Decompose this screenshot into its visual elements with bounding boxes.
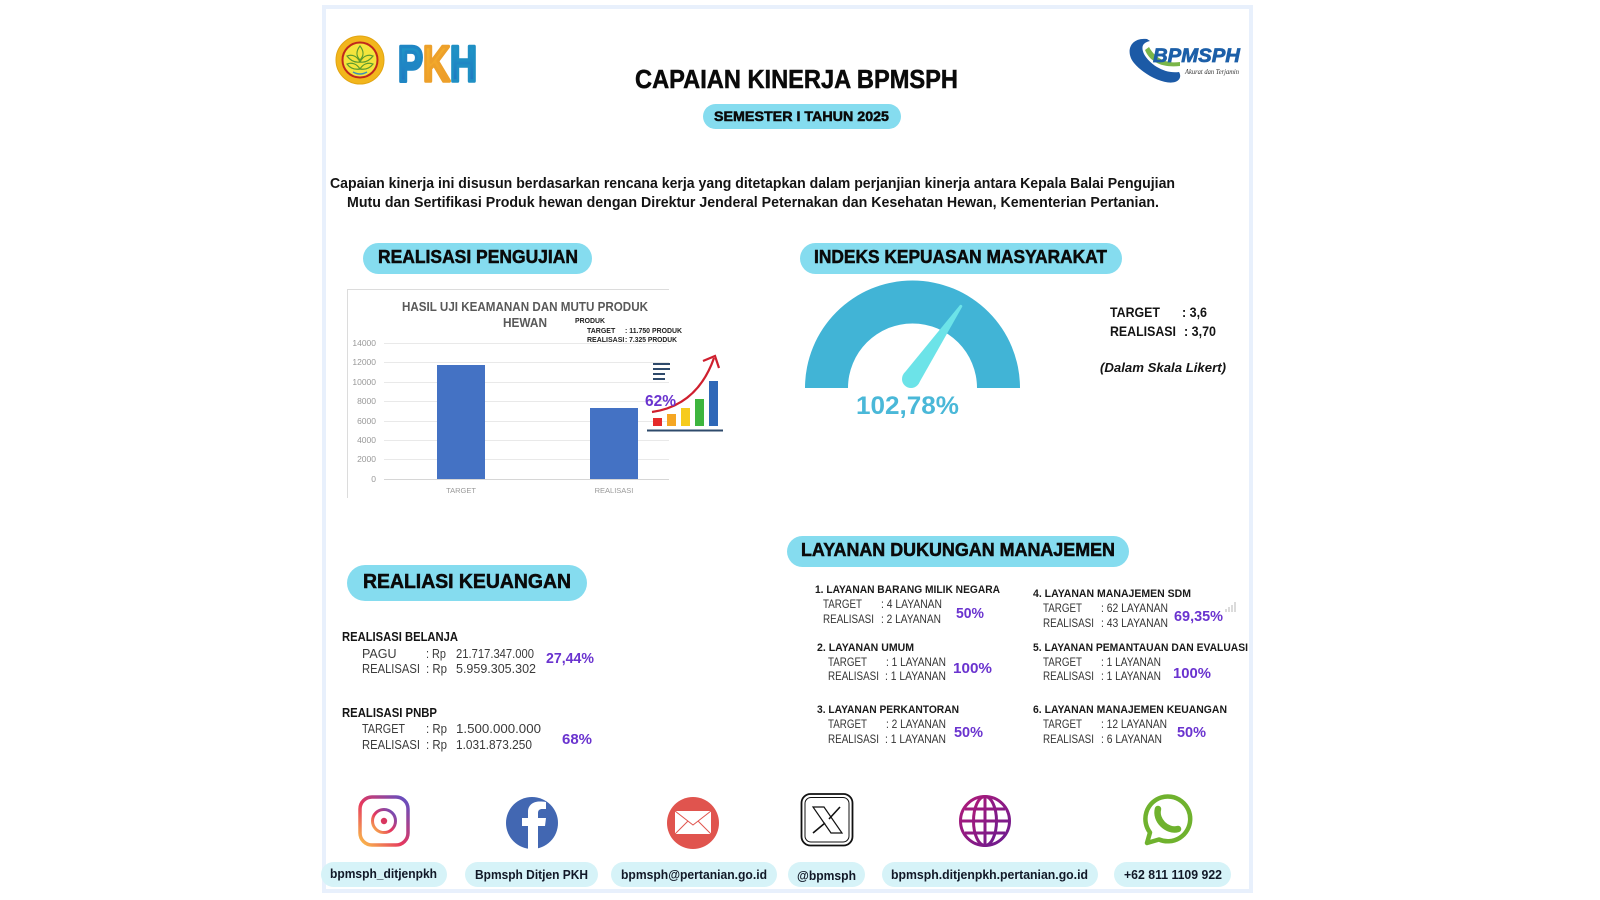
- panel: realisasi PNBP: 1.031.873.250: [456, 738, 532, 752]
- heading: Realiasi Keuangan: REALIASI KEUANGAN: [363, 571, 571, 593]
- item: layanan umum: 2. LAYANAN UMUM: [817, 642, 914, 654]
- logo: PKH: PKH: [398, 36, 477, 92]
- item: layanan barang milik negara: : 2 LAYANAN: [881, 614, 941, 626]
- item: layanan umum: TARGET: [828, 657, 867, 669]
- produk target note: PRODUK: [575, 318, 605, 325]
- item: layanan pemantauan dan evaluasi: : 1 LAYANAN: [1101, 657, 1161, 669]
- panel: realisasi belanja: REALISASI BELANJA: [342, 630, 458, 644]
- panel: realisasi belanja: [342, 630, 594, 676]
- icon: growth chart: [647, 356, 723, 430]
- contact: X handle: [788, 862, 865, 887]
- panel: realisasi PNBP: : Rp: [426, 738, 447, 752]
- item: layanan manajemen keuangan: 6. LAYANAN MANAJEMEN KEUANGAN: [1033, 704, 1227, 716]
- percentage: 68%: [562, 731, 592, 748]
- icon: X: [802, 794, 852, 846]
- contact: website: [882, 862, 1098, 887]
- y axis labels: 8000: [357, 396, 376, 406]
- gauge chart: [805, 280, 1020, 388]
- item: layanan barang milik negara: REALISASI: [823, 614, 874, 626]
- IKM target and realisasi: TARGET: [1110, 304, 1160, 320]
- IKM target and realisasi: [1110, 304, 1216, 339]
- heading: Indeks Kepuasan Masyarakat: [800, 243, 1122, 274]
- page frame: [324, 7, 1251, 891]
- item: layanan manajemen keuangan: : 12 LAYANAN: [1101, 719, 1167, 731]
- item: layanan umum: : 1 LAYANAN: [885, 671, 946, 683]
- panel: realisasi PNBP: REALISASI PNBP: [342, 706, 437, 720]
- item: layanan manajemen keuangan: REALISASI: [1043, 734, 1094, 746]
- item: layanan manajemen SDM: 4. LAYANAN MANAJEMEN SDM: [1033, 588, 1191, 600]
- heading: Layanan Dukungan Manajemen: [787, 536, 1129, 567]
- panel: realisasi belanja: : Rp: [426, 647, 446, 661]
- IKM target and realisasi: : 3,70: [1184, 323, 1216, 339]
- contact: facebook handle: Bpmsph Ditjen PKH: [475, 867, 588, 882]
- heading: Indeks Kepuasan Masyarakat: INDEKS KEPUASAN MASYARAKAT: [814, 247, 1107, 267]
- item: layanan manajemen SDM: [1033, 588, 1223, 630]
- y axis labels: 6000: [357, 416, 376, 426]
- subtitle pill: SEMESTER I TAHUN 2025: [714, 108, 889, 124]
- panel: realisasi belanja: 5.959.305.302: [456, 662, 536, 676]
- subtitle pill: [703, 104, 901, 129]
- item: layanan umum: [817, 642, 992, 683]
- item: layanan manajemen SDM: TARGET: [1043, 603, 1082, 615]
- icon: whatsapp: [1145, 797, 1190, 843]
- likert note: (Dalam Skala Likert): [1100, 360, 1226, 375]
- item: layanan barang milik negara: TARGET: [823, 599, 862, 611]
- panel: realisasi PNBP: : Rp: [426, 722, 447, 736]
- percentage: 50%: [1177, 724, 1206, 741]
- item: layanan manajemen SDM: REALISASI: [1043, 618, 1094, 630]
- item: layanan manajemen keuangan: : 6 LAYANAN: [1101, 734, 1162, 746]
- gauge value: 102,78%: [856, 392, 959, 420]
- heading: Realisasi Pengujian: REALISASI PENGUJIAN: [378, 247, 578, 267]
- produk target note: TARGET: [587, 328, 616, 335]
- y axis labels: 4000: [357, 435, 376, 445]
- item: layanan manajemen SDM: : 62 LAYANAN: [1101, 603, 1168, 615]
- percentage: 27,44%: [546, 650, 594, 667]
- gauge needle: [902, 305, 962, 388]
- panel: realisasi belanja: PAGU: [362, 647, 396, 661]
- contact: website: bpmsph.ditjenpkh.pertanian.go.id: [891, 867, 1088, 882]
- y axis labels: 0: [371, 474, 376, 484]
- icon: globe: [960, 796, 1010, 846]
- heading: Realiasi Keuangan: [347, 565, 587, 601]
- panel: realisasi belanja: REALISASI: [362, 662, 420, 676]
- logo: Kementan seal: [336, 36, 384, 84]
- item: layanan perkantoran: [817, 704, 983, 746]
- icon: email: [667, 797, 719, 849]
- x axis labels: REALISASI: [595, 486, 633, 495]
- heading: Layanan Dukungan Manajemen: LAYANAN DUKUNGAN MANAJEMEN: [801, 540, 1115, 560]
- icon: instagram: [360, 797, 408, 845]
- produk target note: REALISASI: [587, 337, 624, 344]
- chart title: HASIL UJI KEAMANAN DAN MUTU PRODUK: [402, 299, 649, 314]
- panel: bar chart pengujian: [348, 290, 669, 498]
- item: layanan barang milik negara: 1. LAYANAN BARANG MILIK NEGARA: [815, 584, 1000, 596]
- percentage: 50%: [954, 724, 983, 741]
- heading: Realisasi Pengujian: [363, 243, 592, 274]
- item: layanan pemantauan dan evaluasi: [1033, 642, 1248, 683]
- panel: realisasi PNBP: REALISASI: [362, 738, 420, 752]
- bar: target: [437, 365, 485, 479]
- IKM target and realisasi: : 3,6: [1182, 304, 1207, 320]
- bar: realisasi: [590, 408, 638, 479]
- icon: facebook: [506, 797, 558, 849]
- y axis labels: 14000: [352, 338, 376, 348]
- item: layanan umum: : 1 LAYANAN: [886, 657, 946, 669]
- percentage: 69,35%: [1174, 608, 1223, 625]
- y axis labels: 10000: [352, 377, 376, 387]
- logo: BPMSPH: Akurat dan Terjamin: [1184, 67, 1239, 76]
- chart title: [402, 299, 649, 330]
- panel: realisasi belanja: : Rp: [426, 662, 447, 676]
- panel: realisasi PNBP: [342, 706, 592, 752]
- contact: X handle: @bpmsph: [797, 868, 856, 883]
- panel: realisasi PNBP: TARGET: [362, 722, 405, 736]
- contact: email address: bpmsph@pertanian.go.id: [621, 867, 767, 882]
- logo: BPMSPH: BPMSPH: [1153, 46, 1241, 67]
- produk target note: : 11.750 PRODUK: [625, 328, 682, 335]
- item: layanan pemantauan dan evaluasi: TARGET: [1043, 657, 1082, 669]
- item: layanan umum: REALISASI: [828, 671, 879, 683]
- item: layanan barang milik negara: [815, 584, 1000, 626]
- pengujian percentage: 62%: [645, 393, 676, 410]
- item: layanan perkantoran: REALISASI: [828, 734, 879, 746]
- percentage: 50%: [956, 605, 984, 622]
- title: CAPAIAN KINERJA BPMSPH: [635, 66, 958, 94]
- y axis labels: 2000: [357, 454, 376, 464]
- contact: phone number: [1114, 862, 1231, 887]
- item: layanan perkantoran: : 2 LAYANAN: [886, 719, 946, 731]
- item: layanan manajemen keuangan: TARGET: [1043, 719, 1082, 731]
- IKM target and realisasi: REALISASI: [1110, 323, 1176, 339]
- item: layanan pemantauan dan evaluasi: REALISASI: [1043, 671, 1094, 683]
- item: layanan perkantoran: TARGET: [828, 719, 867, 731]
- x axis labels: TARGET: [446, 486, 476, 495]
- chart title: HEWAN: [503, 315, 547, 330]
- panel: realisasi PNBP: 1.500.000.000: [456, 722, 541, 736]
- item: layanan pemantauan dan evaluasi: : 1 LAYANAN: [1101, 671, 1161, 683]
- panel: realisasi belanja: 21.717.347.000: [456, 647, 534, 661]
- icon: faint signal bars: [1226, 602, 1235, 612]
- percentage: 100%: [953, 660, 992, 677]
- x axis labels: [446, 486, 633, 495]
- item: layanan manajemen keuangan: [1033, 704, 1227, 746]
- item: layanan pemantauan dan evaluasi: 5. LAYANAN PEMANTAUAN DAN EVALUASI: [1033, 642, 1248, 654]
- item: layanan barang milik negara: : 4 LAYANAN: [881, 599, 942, 611]
- logo: BPMSPH: [1130, 39, 1241, 83]
- y axis labels: [352, 338, 376, 484]
- produk target note: : 7.325 PRODUK: [625, 337, 677, 344]
- produk target note: [575, 318, 682, 344]
- intro paragraph: [330, 175, 1175, 211]
- contact: phone number: +62 811 1109 922: [1124, 867, 1222, 882]
- item: layanan perkantoran: : 1 LAYANAN: [885, 734, 946, 746]
- contact: instagram handle: bpmsph_ditjenpkh: [330, 866, 437, 881]
- intro paragraph: Mutu dan Sertifikasi Produk hewan dengan Direktur Jenderal Peternakan dan Kesehatan Hewan, Kementerian Pertanian.: [347, 194, 1159, 211]
- contact: instagram handle: [321, 862, 447, 887]
- item: layanan manajemen SDM: : 43 LAYANAN: [1101, 618, 1168, 630]
- intro paragraph: Capaian kinerja ini disusun berdasarkan rencana kerja yang ditetapkan dalam perjanjian kinerja antara Kepala Balai Pengujian: [330, 175, 1175, 192]
- contact: facebook handle: [465, 862, 598, 887]
- y axis labels: 12000: [352, 357, 376, 367]
- percentage: 100%: [1173, 665, 1211, 682]
- item: layanan perkantoran: 3. LAYANAN PERKANTORAN: [817, 704, 959, 716]
- contact: email address: [611, 862, 777, 887]
